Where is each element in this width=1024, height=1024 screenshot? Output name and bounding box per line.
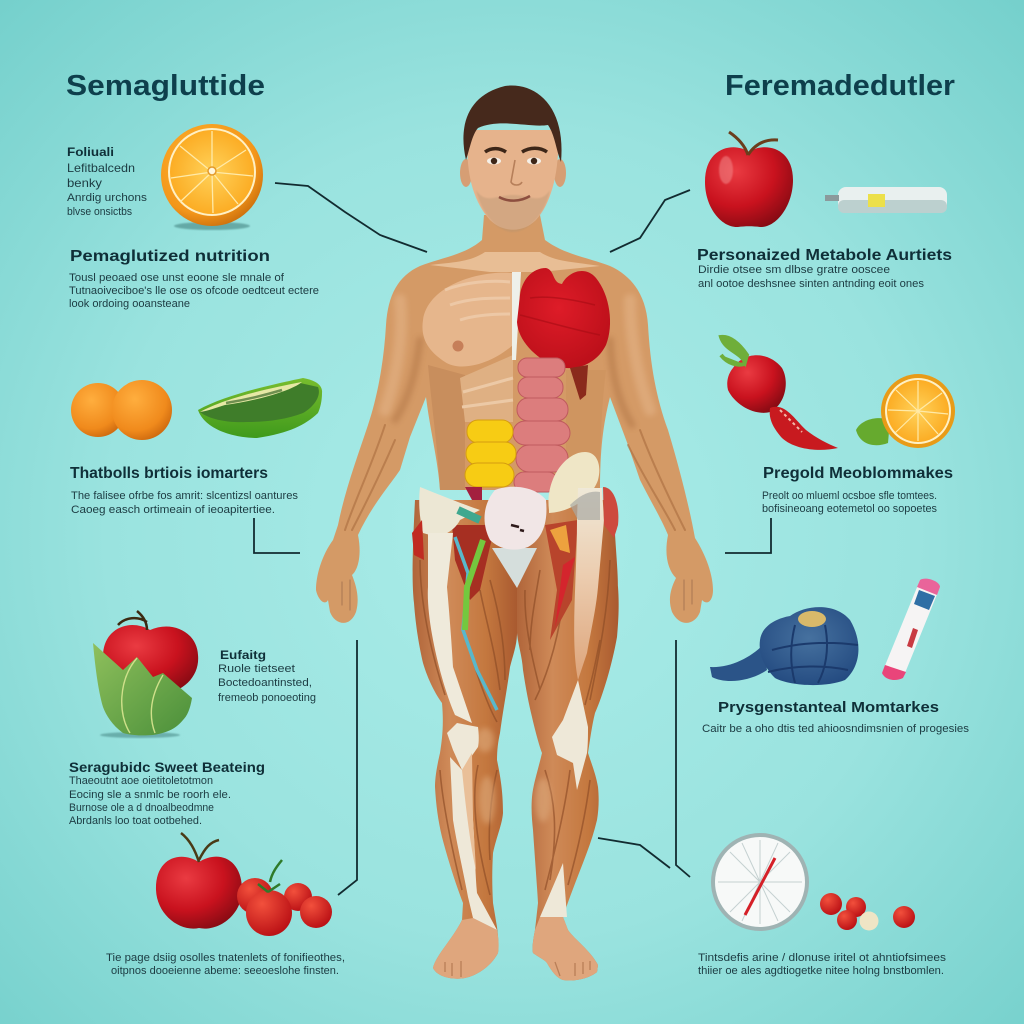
shin bands <box>450 753 497 930</box>
yellow organ <box>465 420 516 487</box>
text block: Eufaitg <box>218 648 316 704</box>
red kidneys <box>603 487 618 538</box>
text block: Thatbolls <box>70 465 299 516</box>
thigh band left <box>428 533 472 723</box>
icon: apple and tomatoes <box>156 833 332 936</box>
text block: Foliuali: blvse onsictbs <box>67 206 132 218</box>
chest muscle <box>422 273 513 367</box>
text block: bottom left <box>106 952 345 977</box>
text block: Foliuali: Anrdig urchons <box>67 192 148 204</box>
icon: two oranges <box>71 380 172 440</box>
connector lines <box>254 183 771 895</box>
text block: Eufaitg: Eufaitg <box>220 648 266 662</box>
blood vessels <box>455 537 497 710</box>
icon: blue organ <box>710 607 858 685</box>
inner pelvis muscles <box>452 520 578 640</box>
icon: dial gauge <box>711 833 809 931</box>
icon: red pepper <box>721 337 838 450</box>
left leg <box>413 500 517 979</box>
text block: Thatbolls: The falisee ofrbe fos amrit: slcentizsl oantures <box>71 490 299 502</box>
icon: lemon slice <box>856 374 955 448</box>
icon: apple with leaves <box>93 611 198 738</box>
icon: small balls <box>820 893 915 930</box>
text block: Seragubidc <box>69 759 265 827</box>
right leg <box>517 500 619 981</box>
heart <box>517 268 610 368</box>
text block: Eufaitg: Ruole tietseet <box>218 663 295 675</box>
text block: bottom right: Tintsdefis arine / dlonuse iritel ot ahntiofsimees <box>698 952 947 964</box>
text block: Prysgenstanteal: Caitr be a oho dtis ted ahioosndimsnien of progesies <box>702 723 970 735</box>
text block: Eufaitg: fremeob ponoeoting <box>218 692 316 704</box>
text block: bottom left: oitpnos dooeienne abeme: seeoeslohe finsten. <box>111 965 339 977</box>
text block: Seragubidc: Thaeoutnt aoe oietitoletotmon <box>69 775 213 787</box>
icon: vertical pen <box>882 579 940 680</box>
upper body silhouette with arms <box>316 215 713 623</box>
icon: orange slice <box>161 124 263 230</box>
text block: Personalized Metabole: Dirdie otsee sm dlbse gratre ooscee <box>698 264 890 276</box>
text block: bottom right <box>698 952 947 977</box>
text block: Personalized Metabole <box>697 247 952 290</box>
text block: Pregold: Pregold Meoblommakes <box>763 465 953 482</box>
text block: Prysgenstanteal: Prysgenstanteal Momtarkes <box>718 700 939 716</box>
icon: cucumber <box>198 378 322 438</box>
text block: Seragubidc: Eocing sle a snmlc be roorh ele. <box>69 789 231 801</box>
beige organ <box>548 452 599 513</box>
torso side muscle <box>428 365 465 490</box>
text block: Pemaglutized nutrition: Pemaglutized nutrition <box>70 248 270 265</box>
arm shading <box>342 300 692 610</box>
text block: Foliuali <box>67 145 148 218</box>
text block: Seragubidc: Burnose ole a d dnoalbeodmne <box>69 802 214 814</box>
head <box>460 86 566 232</box>
icon: red apple top right <box>705 132 793 227</box>
hip bone left <box>419 487 480 537</box>
text block: Foliuali: Foliuali <box>67 145 114 159</box>
title: left: Semagluttide <box>66 70 265 102</box>
text block: Pregold: Preolt oo mlueml ocsboe sfle tomtees. <box>762 490 937 502</box>
pelvis white <box>485 487 546 588</box>
icon: injector pen top right <box>825 187 947 213</box>
text block: Personalized Metabole: Personaized Metabole Aurtiets <box>697 247 952 264</box>
text block: Seragubidc: Seragubidc Sweet Beateing <box>69 759 265 775</box>
shoulder muscle highlight <box>430 252 600 272</box>
text block: Pregold <box>762 465 953 515</box>
text block: Pemaglutized nutrition: Tousl peoaed ose unst eoone sle mnale of <box>69 272 285 284</box>
text block: Personalized Metabole: anl ootoe deshsnee sinten antnding eoit ones <box>698 278 925 290</box>
text block: bottom left: Tie page dsiig osolles tnatenlets of fonifieothes, <box>106 952 345 964</box>
knee caps <box>447 723 479 770</box>
text block: Foliuali: benky <box>67 176 102 190</box>
feet <box>433 917 598 981</box>
text block: Thatbolls: Thatbolls brtiois iomarters <box>70 465 268 482</box>
text block: Prysgenstanteal <box>702 700 970 735</box>
text block: Seragubidc: Abrdanls loo toat ootbehed. <box>69 815 202 827</box>
text block: Eufaitg: Boctedoantinsted, <box>218 677 312 689</box>
body figure <box>316 86 713 981</box>
text block: bottom right: thiier oe ales agdtiogetke nitee holng bnstbomlen. <box>698 965 944 977</box>
text block: Foliuali: Lefitbalcedn <box>67 161 135 175</box>
intestines <box>513 358 570 492</box>
sternum <box>512 272 521 360</box>
title: right: Feremadedutler <box>725 70 955 102</box>
abdominal muscle <box>460 355 513 422</box>
text block: Pemaglutized nutrition: Tutnaoiveciboe's lle ose os ofcode oedtceut ectere <box>69 285 319 297</box>
text block: Thatbolls: Caoeg easch ortimeain of ieoapitertiee. <box>71 504 275 516</box>
hip bone right <box>574 488 604 680</box>
text block: Pregold: bofisineoang eotemetol oo sopoetes <box>762 503 937 515</box>
text block: Pemaglutized nutrition <box>69 248 319 310</box>
text block: Pemaglutized nutrition: look ordoing ooansteane <box>69 298 190 310</box>
calf highlights <box>476 728 551 824</box>
thigh muscle detail <box>420 560 610 895</box>
